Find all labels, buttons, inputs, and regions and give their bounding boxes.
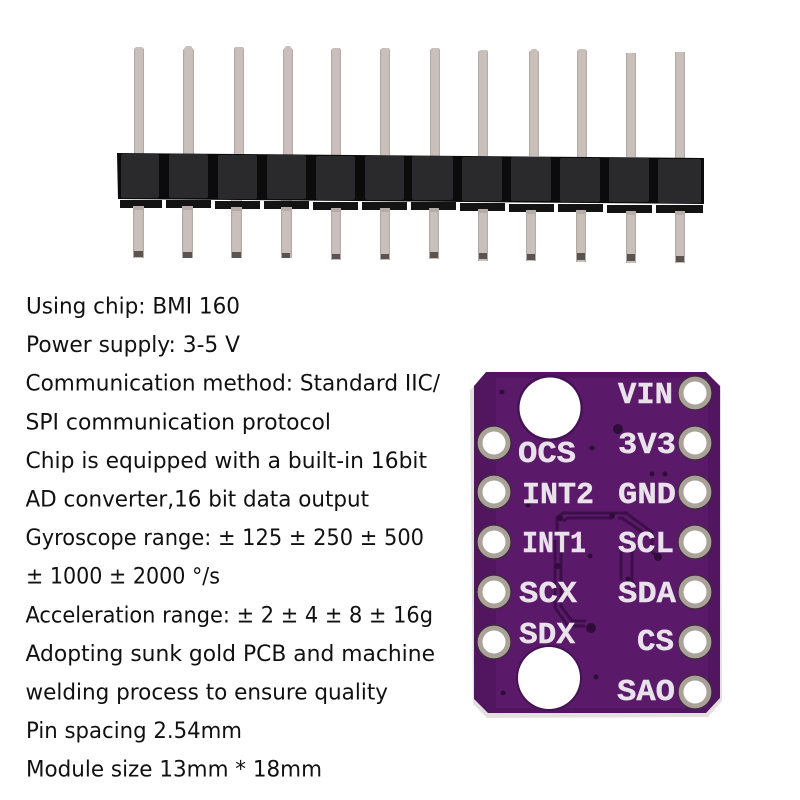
left pads (480, 429, 508, 656)
silkscreen left labels (518, 437, 594, 653)
spec line 9: Acceleration range: ± 2 ± 4 ± 8 ± 16g (26, 602, 433, 628)
spec line 11: welding process to ensure quality (26, 680, 388, 706)
board edge (470, 372, 722, 718)
label OCS: OCS (518, 437, 576, 472)
upper pins (134, 46, 685, 158)
label VIN: VIN (618, 378, 673, 413)
spec line 6: AD converter,16 bit data output (26, 486, 369, 512)
label INT1: INT1 (522, 527, 586, 562)
spec line 3: Communication method: Standard IIC/ (26, 371, 440, 397)
label SAO: SAO (617, 675, 675, 710)
ground plane shading (496, 378, 708, 708)
plastic strip base (117, 153, 704, 204)
lower pins (133, 200, 685, 263)
label CS: CS (637, 625, 674, 660)
label SDA: SDA (618, 577, 676, 612)
pin header (117, 46, 704, 263)
spec line 7: Gyroscope range: ± 125 ± 250 ± 500 (26, 525, 424, 551)
right pads (681, 379, 709, 706)
plastic block faces (121, 154, 701, 203)
label 3V3: 3V3 (618, 428, 676, 463)
board surface (474, 372, 720, 713)
spec line 12: Pin spacing 2.54mm (26, 718, 242, 744)
spec line 4: SPI communication protocol (26, 409, 331, 435)
circuit traces (555, 513, 660, 626)
label INT2: INT2 (522, 478, 594, 513)
mounting hole bottom (516, 645, 582, 711)
spec line 1: Using chip: BMI 160 (26, 294, 240, 320)
spec line 10: Adopting sunk gold PCB and machine (26, 641, 435, 667)
spec line 8: ± 1000 ± 2000 °/s (26, 564, 220, 590)
specification text (26, 294, 440, 783)
mounting hole top (517, 375, 583, 441)
spec line 2: Power supply: 3-5 V (26, 332, 241, 358)
silkscreen right labels (617, 378, 676, 710)
lower pin tips (134, 251, 684, 262)
plastic skirts (120, 200, 703, 213)
spec line 5: Chip is equipped with a built-in 16bit (26, 448, 427, 474)
label GND: GND (618, 478, 676, 513)
spec line 13: Module size 13mm * 18mm (26, 757, 322, 783)
pin necks in front of skirts (133, 206, 685, 215)
label SDX: SDX (519, 618, 575, 653)
BMI160 purple circuit board (470, 372, 722, 718)
pad outlines (477, 376, 712, 709)
label SCX: SCX (519, 577, 577, 612)
label SCL: SCL (618, 527, 674, 562)
vias (500, 390, 668, 696)
